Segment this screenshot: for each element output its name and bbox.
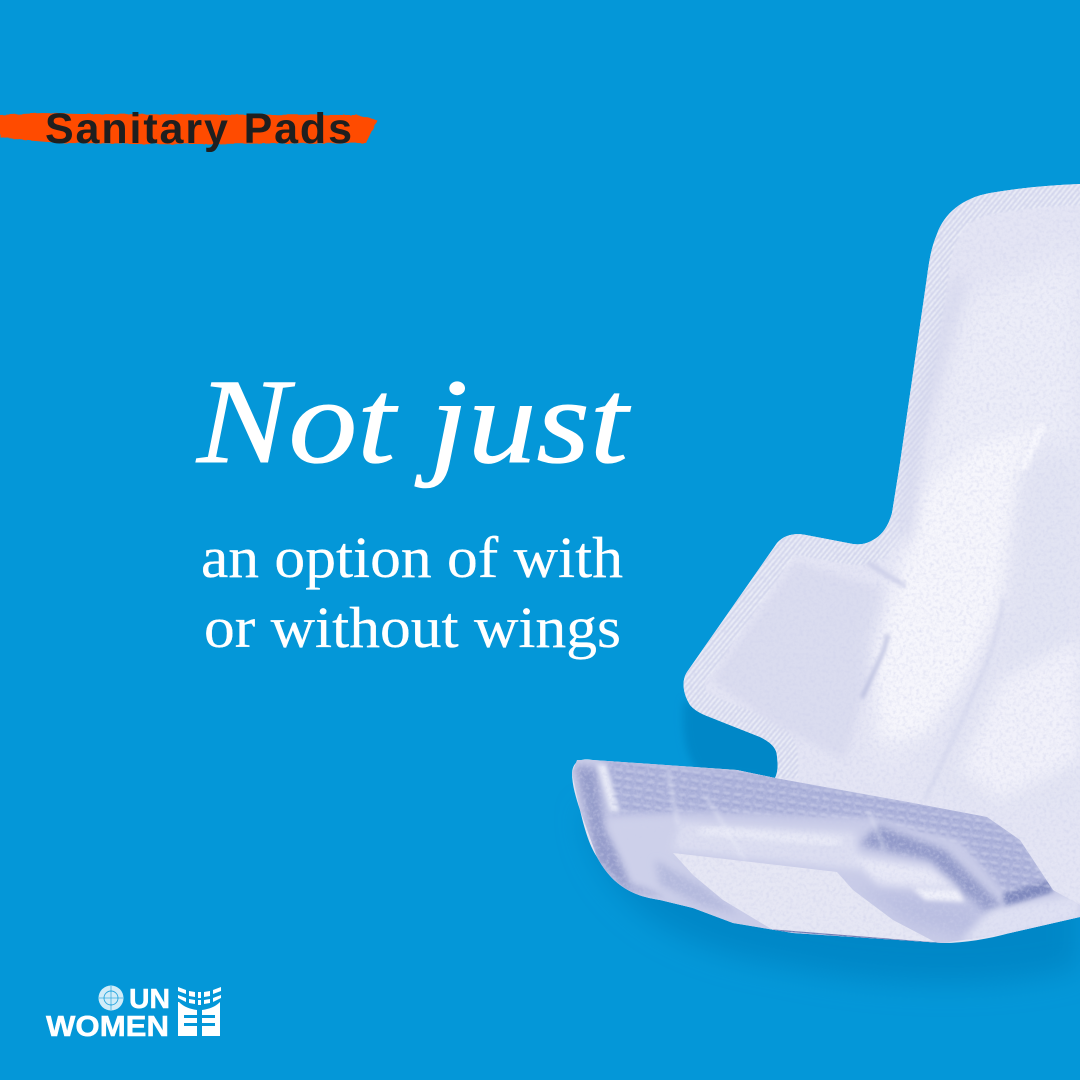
illustration: sanitary pad	[560, 170, 1080, 983]
quilted top band	[600, 758, 1052, 890]
logo: UN Women	[46, 983, 221, 1043]
label text: Sanitary Pads	[45, 105, 352, 153]
logo text UN: UN	[129, 983, 170, 1014]
UN emblem	[98, 986, 124, 1010]
orange brush stroke	[0, 113, 377, 144]
embossed edge	[684, 184, 1080, 778]
adhesive strip	[673, 853, 937, 943]
pad shape	[560, 170, 1080, 960]
subheading text: an option of with	[201, 525, 623, 590]
folds	[862, 634, 888, 698]
UN Women emblem	[178, 987, 221, 1036]
folded flap	[572, 760, 1080, 943]
wing	[720, 568, 876, 752]
absorbent core highlight	[896, 300, 1051, 542]
paper texture	[560, 170, 1080, 960]
subheading text	[201, 525, 623, 660]
headline: Not just	[196, 355, 632, 489]
strip shadow	[655, 862, 730, 912]
pad drop shadow	[585, 700, 1080, 983]
subheading text: or without wings	[204, 595, 621, 660]
label: Sanitary Pads on orange brush stroke	[0, 105, 377, 153]
logo text WOMEN: WOMEN	[46, 1011, 169, 1043]
